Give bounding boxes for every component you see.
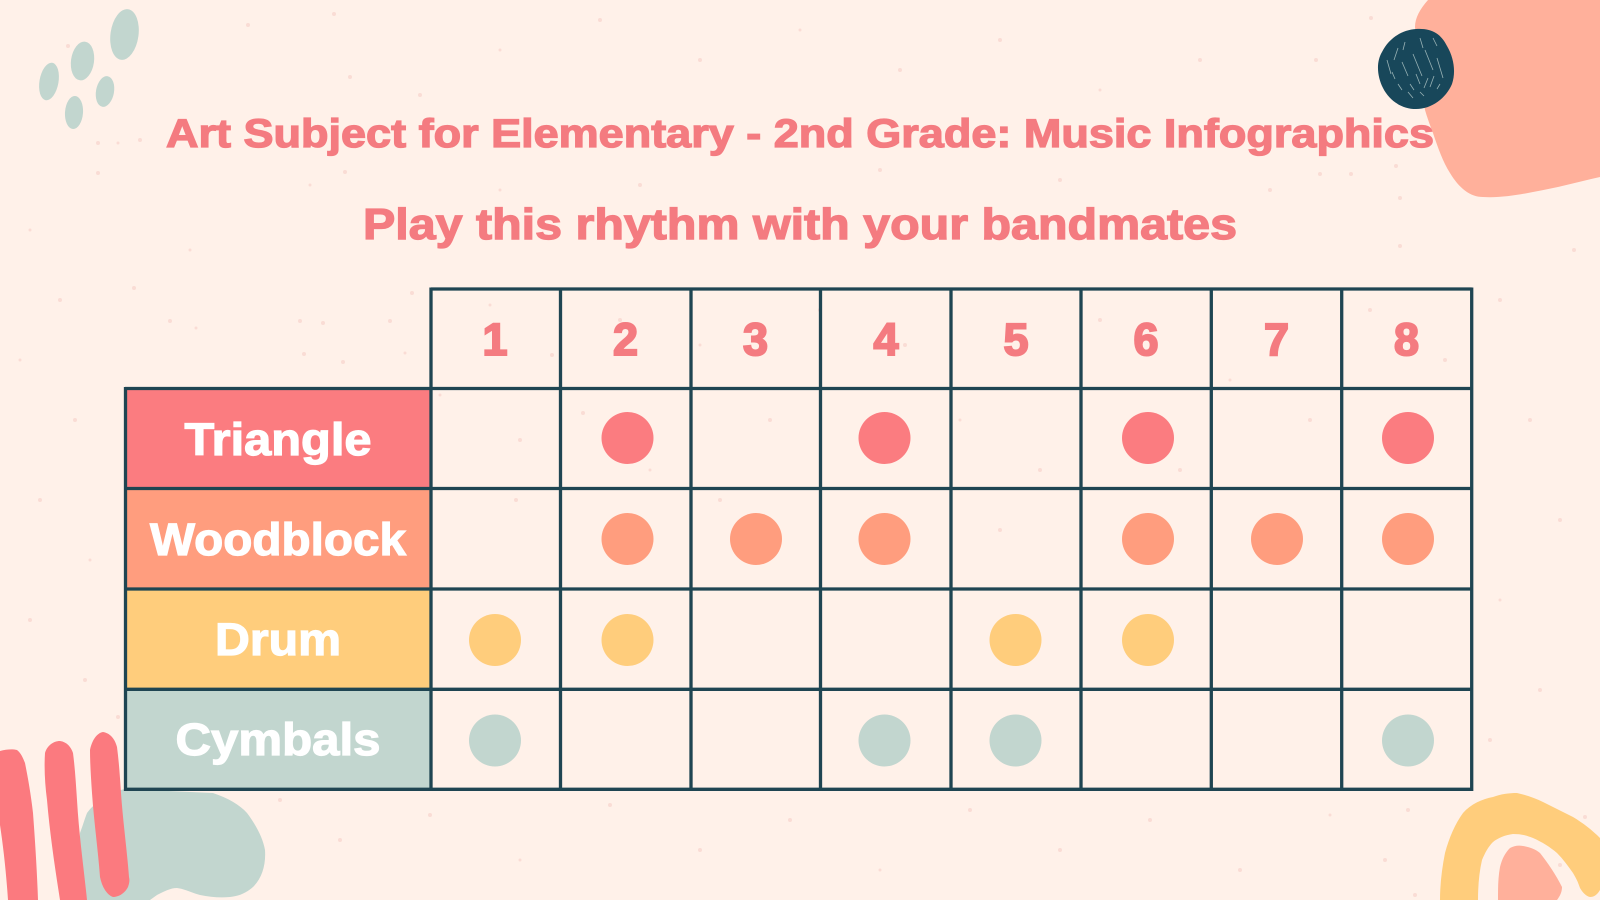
column numbers: 2 [613, 314, 638, 365]
title: Art Subject for Elementary - 2nd Grade: Music Infographics [166, 112, 1434, 156]
column numbers: 1 [482, 314, 508, 365]
dots: Woodblock [602, 513, 1434, 565]
subtitle: Play this rhythm with your bandmates [363, 200, 1237, 249]
row label: Drum: Drum [215, 614, 341, 665]
decoration: teal blob bottom left [80, 789, 265, 900]
column numbers [482, 314, 1419, 365]
dots: Drum [469, 614, 1174, 666]
decoration: teal dots top left [36, 7, 142, 130]
row label: Cymbals [125, 689, 431, 789]
column numbers: 8 [1394, 314, 1419, 365]
row label: Cymbals: Cymbals [176, 714, 380, 765]
row label: Woodblock: Woodblock [150, 514, 407, 565]
row label: Woodblock [125, 488, 431, 589]
decoration: peach blob top right [1415, 0, 1600, 197]
column numbers: 5 [1003, 314, 1029, 365]
decoration: yellow arch and pink blob bottom right [1440, 793, 1600, 900]
column numbers: 6 [1133, 314, 1159, 365]
row label: Triangle [125, 388, 431, 488]
column numbers: 4 [873, 314, 899, 365]
row label: Drum [125, 589, 431, 689]
dots: Cymbals [469, 714, 1434, 766]
rhythm table [125, 288, 1472, 791]
column numbers: 3 [743, 314, 768, 365]
decoration: coral stripes bottom left [0, 732, 129, 900]
row label: Triangle: Triangle [184, 414, 372, 465]
dots: Triangle [602, 412, 1434, 464]
decoration: dark scribble circle [1378, 29, 1454, 109]
column numbers: 7 [1264, 314, 1289, 365]
